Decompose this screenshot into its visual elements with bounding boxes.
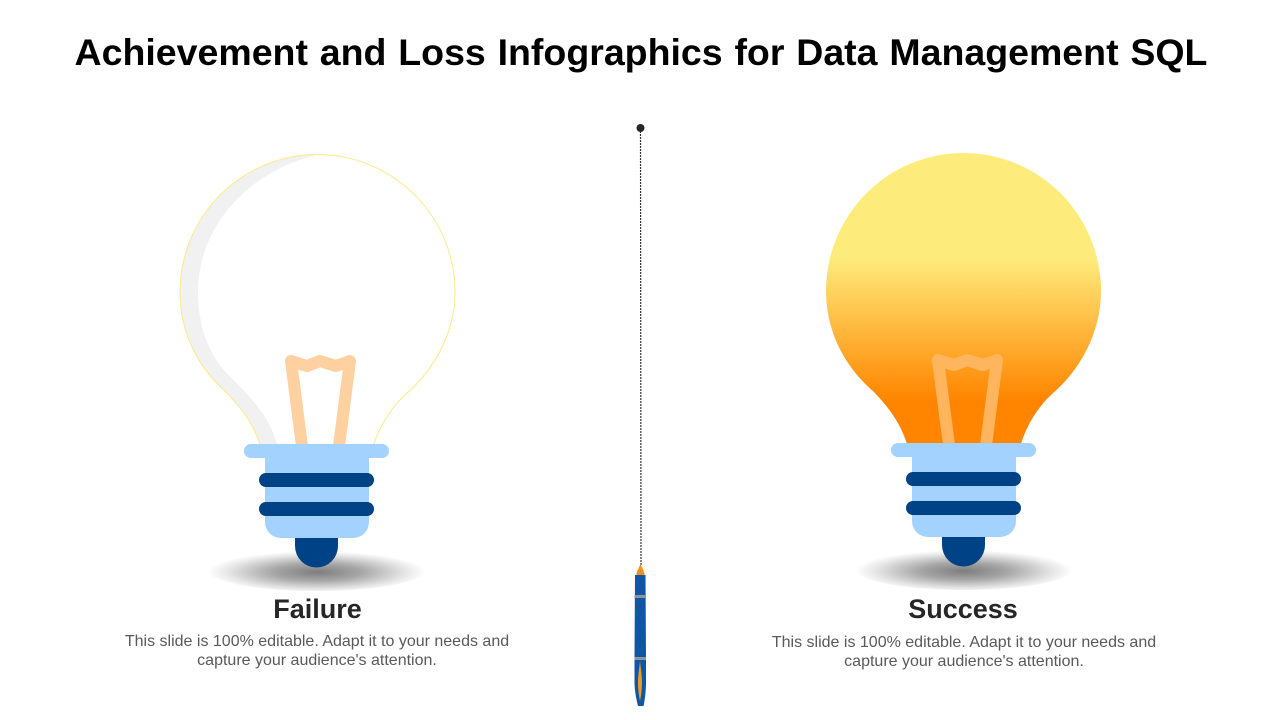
failure bulb — [180, 154, 455, 591]
failure bulb outline — [180, 155, 455, 444]
failure bulb base — [244, 444, 389, 568]
failure bulb shadow — [208, 549, 426, 591]
failure description — [125, 633, 509, 669]
success heading: Success — [908, 594, 1018, 624]
failure description: capture your audience's attention. — [197, 652, 437, 669]
failure heading: Failure — [273, 594, 362, 624]
failure filament — [291, 361, 350, 446]
title: Achievement and Loss Infographics for Data Management SQL — [75, 31, 1207, 73]
success description — [772, 634, 1156, 670]
icon: fountain pen — [634, 564, 646, 706]
success bulb glass — [826, 153, 1101, 444]
success description: capture your audience's attention. — [844, 653, 1084, 670]
success bulb base — [891, 443, 1036, 566]
success bulb — [826, 153, 1101, 590]
divider line with end dot — [636, 124, 644, 566]
success description: This slide is 100% editable. Adapt it to your needs and — [772, 634, 1156, 651]
success bulb shadow — [855, 548, 1073, 590]
failure bulb glass highlight — [180, 154, 320, 444]
failure description: This slide is 100% editable. Adapt it to your needs and — [125, 633, 509, 650]
success filament — [938, 360, 997, 445]
